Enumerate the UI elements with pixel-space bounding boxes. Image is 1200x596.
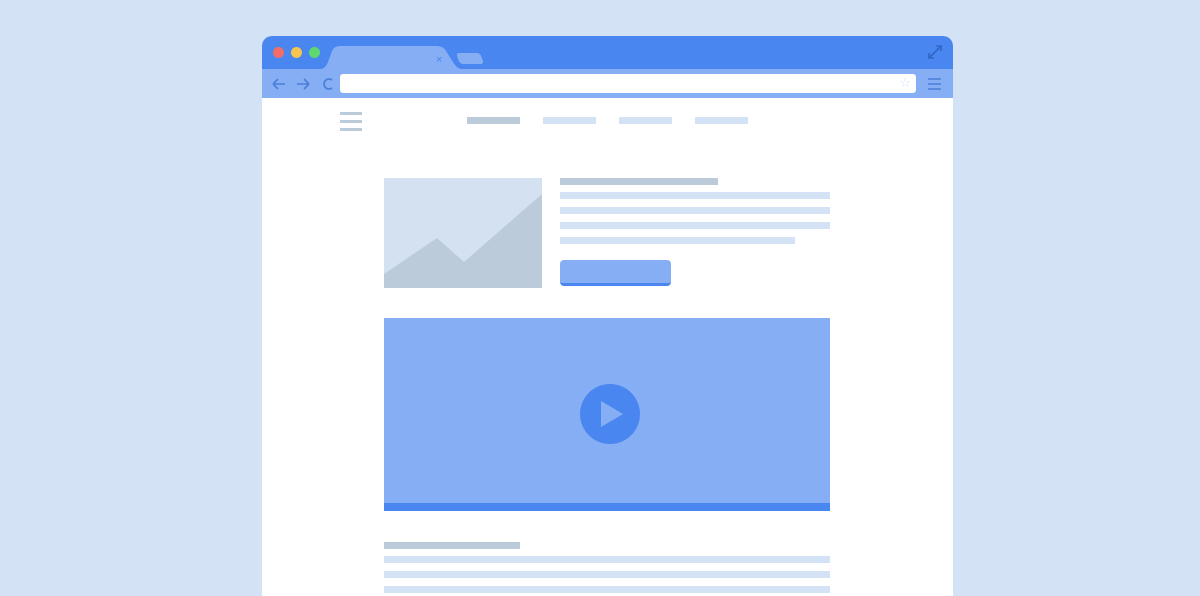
page hamburger [340,112,362,131]
bottom text block [384,542,830,593]
browser window [262,36,953,596]
progress bar [384,503,830,511]
video player [384,318,830,511]
active tab: × [436,54,442,66]
tab bar [262,36,953,70]
address bar [340,74,916,93]
window buttons [273,47,284,58]
toolbar [262,69,953,98]
text block [560,178,830,244]
image placeholder [384,178,542,288]
icon: fullscreen [928,45,942,59]
icon: play [580,384,640,444]
address bar: ☆ [899,75,911,90]
nav icons [272,78,332,90]
icon: menu [928,78,941,90]
nav links [467,117,748,124]
button [560,260,671,286]
active tab [322,46,460,69]
inactive tab [456,53,484,64]
